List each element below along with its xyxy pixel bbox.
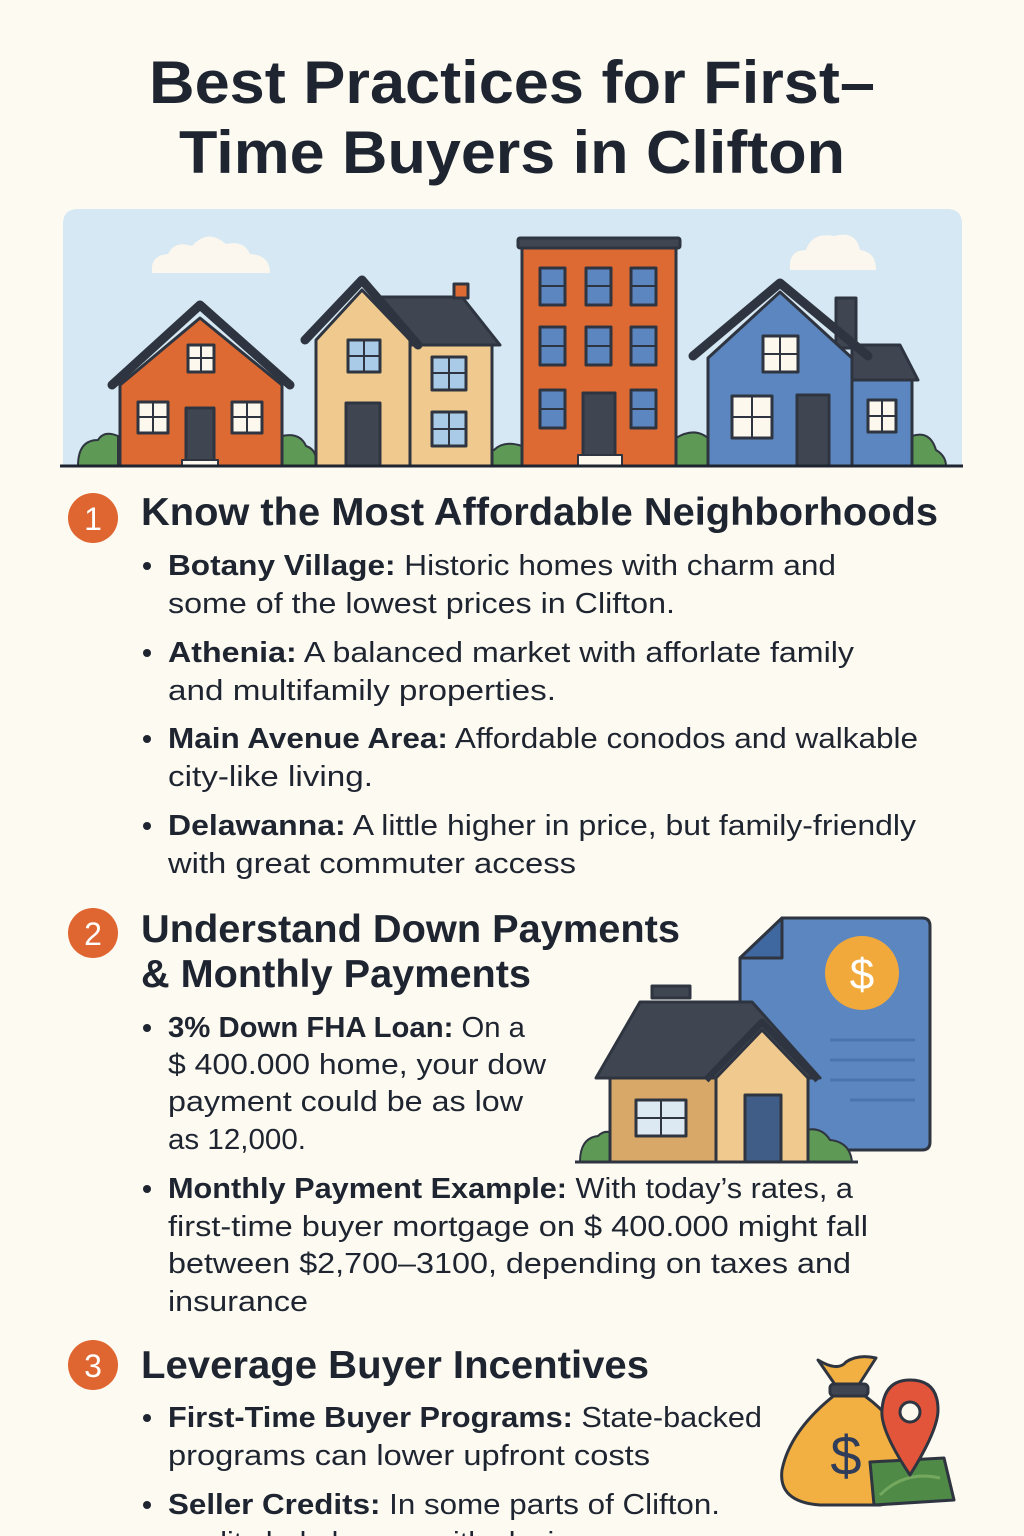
banner: street of houses [60, 209, 963, 466]
badge 1: 1 [84, 501, 102, 537]
title: Time Buyers in Clifton [179, 119, 845, 186]
heading 1: Know the Most Affordable Neighborhoods [141, 491, 938, 534]
bullets 2: payment could be as low [168, 1086, 524, 1118]
icon: money bag with map pin: $ [830, 1424, 862, 1487]
icon: money bag with map pin [782, 1357, 954, 1505]
bullets 1: Main Avenue Area: Affordable conodos and walkable [168, 723, 918, 755]
clouds [152, 235, 876, 273]
section 3 [68, 1340, 954, 1536]
bullets 3: First-Time Buyer Programs: State-backed [168, 1402, 762, 1434]
bullets 3 [143, 1402, 762, 1536]
house 2: beige [305, 280, 500, 466]
house 4: blue [693, 283, 918, 466]
building 3: apartments [518, 238, 680, 466]
title: Best Practices for First– [149, 49, 875, 116]
bullets 1: Botany Village: Historic homes with charm and [168, 550, 836, 582]
bullets 2: between $2,700–3100, depending on taxes and [168, 1248, 851, 1280]
illustration: house with mortgage document [575, 918, 930, 1162]
badge 1 [68, 493, 118, 543]
bullets 3: programs can lower upfront costs [168, 1440, 650, 1472]
bullets 2: insurance [168, 1286, 308, 1318]
bushes [78, 432, 946, 466]
heading 3: Leverage Buyer Incentives [141, 1344, 649, 1387]
title [149, 49, 875, 186]
bullets 1 [143, 550, 918, 880]
badge 3: 3 [84, 1348, 102, 1384]
illustration: house with mortgage document: $ [850, 950, 874, 999]
house 1: orange [112, 305, 290, 466]
bullets 1: Athenia: A balanced market with afforlate family [168, 637, 855, 669]
heading 2: Understand Down Payments [141, 908, 680, 951]
section 2 [68, 908, 930, 1318]
badge 2 [68, 908, 118, 958]
bullets 1: city-like living. [168, 761, 373, 793]
bullets 2: as 12,000. [168, 1124, 306, 1156]
heading 2 [141, 908, 680, 996]
bullets 3: Seller Credits: In some parts of Clifton. [168, 1489, 720, 1521]
bullets 2: 3% Down FHA Loan: On a [168, 1012, 526, 1044]
bullets 1: some of the lowest prices in Clifton. [168, 588, 675, 620]
badge 2: 2 [84, 916, 102, 952]
bullets 1: Delawanna: A little higher in price, but family-friendly [168, 810, 917, 842]
section 1 [68, 491, 938, 880]
bullets 2 [143, 1012, 868, 1318]
badge 3 [68, 1340, 118, 1390]
bullets 2: first-time buyer mortgage on $ 400.000 might fall [168, 1211, 868, 1243]
bullets 2: $ 400.000 home, your dow [168, 1049, 547, 1081]
bullets 1: with great commuter access [167, 848, 576, 880]
heading 2: & Monthly Payments [141, 953, 531, 996]
bullets 1: and multifamily properties. [168, 675, 556, 707]
bullets 2: Monthly Payment Example: With today’s rates, a [168, 1173, 854, 1205]
